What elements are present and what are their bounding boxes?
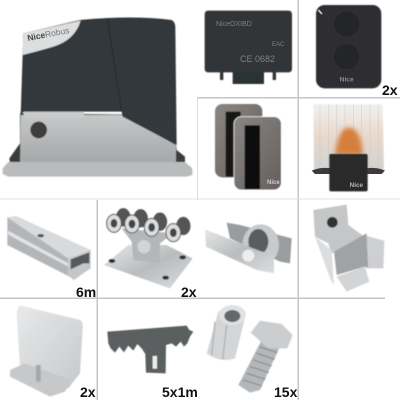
photocell logo: Nice [267, 180, 280, 186]
panel: bolt and rivet nut [207, 305, 293, 393]
panel: gear rack [107, 326, 193, 373]
receiver markings: EAC [272, 42, 285, 48]
carriage wheels [107, 209, 190, 242]
quantity: rack: 5x1m [162, 384, 198, 400]
motor base [9, 113, 185, 163]
panel: remote control [316, 5, 381, 88]
receiver markings [216, 21, 285, 64]
panel: gate stop plate [10, 306, 83, 397]
panel: photocells [215, 104, 281, 190]
motor brand label: NiceRobus [26, 25, 70, 43]
panel: flashing lamp: Nice [350, 182, 363, 189]
receiver markings: NiceOXIBD [216, 21, 252, 28]
panel: support roller [205, 223, 292, 273]
motor hole [30, 122, 47, 138]
quantity: rail length: 6m [76, 284, 96, 300]
panel: end stop bracket [313, 205, 384, 292]
panel: receiver [205, 11, 292, 84]
panel: carriage [104, 209, 193, 288]
quantity: bolts: 15x [274, 384, 298, 400]
panel: flashing lamp [312, 104, 385, 191]
panel: motor [3, 17, 192, 177]
motor label panel [23, 21, 81, 55]
panel: remote control: Nice [340, 77, 354, 84]
panel: guide rail [7, 216, 91, 280]
quantity: stop plate: 2x [80, 384, 96, 400]
motor dark cover [21, 17, 177, 145]
receiver markings: CE 0682 [240, 54, 275, 64]
quantity: carriage: 2x [181, 284, 197, 300]
quantity: remote: 2x [382, 82, 398, 98]
